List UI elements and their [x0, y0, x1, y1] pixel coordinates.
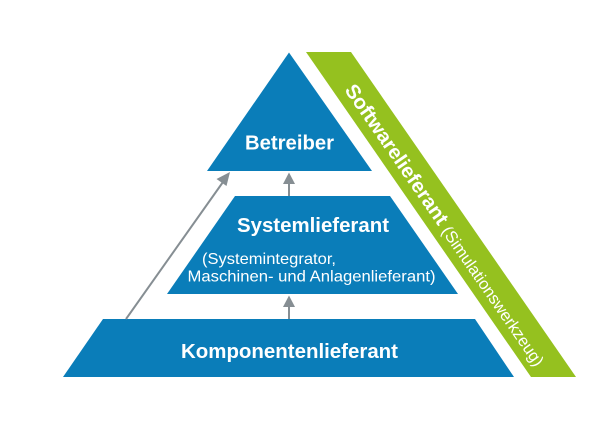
panel: Betreiber tier — [207, 52, 372, 171]
text block: Systemintegrator description — [188, 251, 436, 286]
text: Softwarelieferant: Softwarelieferant — [340, 80, 453, 230]
heading: Betreiber: Betreiber — [245, 132, 334, 154]
arrow: Komponentenlieferant to Systemlieferant — [283, 296, 295, 319]
heading: Komponentenlieferant: Komponentenlieferant — [181, 341, 398, 363]
arrow: Komponentenlieferant to Betreiber — [126, 172, 230, 319]
arrow: Systemlieferant to Betreiber — [283, 172, 295, 196]
text block: Systemintegrator description: (Systemintegrator, — [202, 251, 336, 268]
heading: Systemlieferant: Systemlieferant — [237, 215, 389, 237]
panel: Softwarelieferant band — [306, 52, 576, 377]
panel: Systemlieferant tier — [167, 196, 458, 294]
text: Simulationswerkzeug: (Simulationswerkzeug) — [438, 223, 547, 370]
panel: Komponentenlieferant tier — [63, 319, 514, 377]
text block: Systemintegrator description: Maschinen- und Anlagenlieferant) — [188, 268, 436, 286]
